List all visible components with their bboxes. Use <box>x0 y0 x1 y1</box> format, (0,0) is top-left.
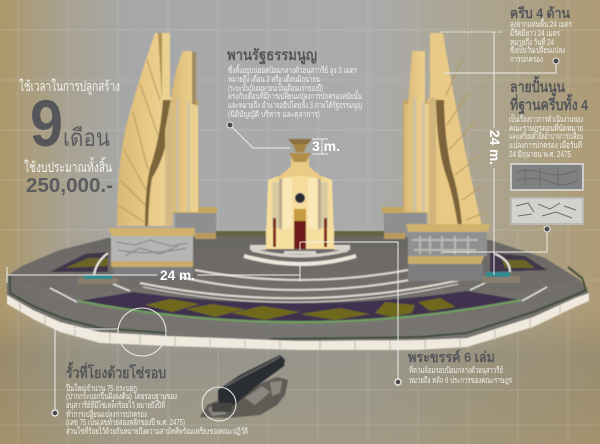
rear flower beds <box>50 252 547 272</box>
panel: four fins: ซึ่งเป็นวันเปลี่ยนแปลง <box>510 44 565 55</box>
panel: constitution tray: ตรงกับเดือนที่มีการเปลี่ยนแปลงการปกครองสมัยนั้น <box>228 90 362 101</box>
headline: time and budget: ใช้งบประมาณทั้งสิ้น <box>24 157 112 175</box>
panel: six swords: ที่ตามล้อมรอบป้อมกลางตัวอนุสาวรีย์ <box>409 364 503 376</box>
left base with relief <box>108 228 195 276</box>
highlight circle on cannon <box>202 387 236 421</box>
panel: relief pattern <box>509 75 589 232</box>
panel: chain fence: รั้วที่โยงด้วยโซ่รอบ <box>66 361 166 382</box>
steps <box>140 270 460 302</box>
white dashes <box>50 283 547 302</box>
headline: time and budget: เดือน <box>63 125 110 152</box>
headline: time and budget: ใช้เวลาในการปลูกสร้าง <box>19 78 120 95</box>
headline: time and budget: 9 <box>30 86 63 160</box>
right wing <box>403 33 486 226</box>
panel: six swords: พระขรรค์ 6 เล่ม <box>408 349 495 365</box>
pavement <box>7 236 589 341</box>
platform rim <box>7 293 589 350</box>
relief photo: light <box>510 197 584 225</box>
dimension: 24 m horizontal: 24 m. <box>160 267 195 283</box>
monument illustration <box>7 33 589 350</box>
panel: constitution tray: และหมายถึง อำนาจอธิปไตยทั้ง 3 ภายใต้รัฐธรรมนูญ <box>228 99 362 111</box>
panel: constitution tray: (นิติบัญญัติ บริหาร และตุลาการ) <box>228 109 320 120</box>
panel: chain fence: อนุสาวรีย์ที่มีโซ่เหล็กร้อยไว้ หมายถึงปีที่ <box>66 399 165 411</box>
headline: time and budget <box>19 78 120 197</box>
panel: four fins: สูงจากแท่นพื้น 24 เมตร <box>510 18 572 30</box>
icon: cannon <box>200 355 288 418</box>
panel: relief pattern: 24 มิถุนายน พ.ศ. 2475 <box>509 149 571 160</box>
relief photo: dark <box>510 163 584 191</box>
panel: constitution tray <box>227 47 362 128</box>
panel: chain fence: ปืนใหญ่จำนวน 75 กระบอก <box>66 383 137 393</box>
dome <box>270 158 330 182</box>
panel: chain fence: (ปากกระบอกปืนฝังลงดิน) โดยรอบฐานของ <box>66 391 177 402</box>
dimension: 3 m: 3 m. <box>312 138 340 154</box>
dimension: 24 m vertical: 24 m. <box>487 130 503 165</box>
central turret <box>244 139 356 264</box>
circular window <box>294 192 306 204</box>
body <box>266 173 334 240</box>
back hedge <box>196 231 404 244</box>
rear pedestals <box>173 207 428 239</box>
side doors <box>273 218 327 247</box>
panel: constitution tray: ซึ่งตั้งอยู่บนยอดป้อมกลางตัวอนุสาวรีย์ สูง 3 เมตร <box>228 64 357 76</box>
fountains <box>78 253 520 284</box>
panel: constitution tray: พานรัฐธรรมนูญ <box>227 47 317 65</box>
panel: relief pattern: ลายปั้นนูน <box>510 75 566 97</box>
panel: chain fence: ทำการเปลี่ยนแปลงการปกครอง <box>66 408 147 419</box>
panel: chain fence: ส่วนโซ่ที่ร้อยไว้ด้วยกันหมายถึงความสามัคคีพร้อมเพรียงของคณะปฏิวัติ <box>66 425 248 436</box>
panel: chain fence: (เลข 75 เป็นเลขท้ายสองหลักของปี พ.ศ. 2475) <box>66 416 185 427</box>
right base with relief <box>406 224 490 281</box>
circular platform <box>7 231 589 350</box>
panel: constitution tray: หมายถึง เดือน 3 หรือ เดือนมิถุนายน <box>228 74 320 85</box>
panel: four fins: การปกครอง <box>510 54 543 64</box>
panel: four fins <box>510 5 572 64</box>
panel: six swords: หมายถึง หลัก 6 ประการของคณะราษฎร <box>409 375 512 385</box>
outer hedge <box>10 267 586 339</box>
panel: four fins: มีรัศมียาว 24 เมตร <box>510 28 560 38</box>
constitution tray <box>288 139 312 162</box>
front flower bed <box>78 291 521 322</box>
panel: chain fence <box>52 361 248 436</box>
headline: time and budget: 250,000.- <box>26 175 113 197</box>
panel: four fins: ครีบ 4 ด้าน <box>510 5 570 21</box>
panel: four fins: หมายถึง วันที่ 24 <box>510 36 554 47</box>
callout lines <box>7 32 556 413</box>
paving lines <box>20 250 580 338</box>
steps <box>244 256 356 264</box>
left wing <box>117 33 199 226</box>
panel: constitution tray: (ระยะนั้นนับเมษายนเป็นเดือนแรกของปี) <box>228 82 323 93</box>
panel: six swords <box>395 349 512 385</box>
door <box>294 209 306 249</box>
